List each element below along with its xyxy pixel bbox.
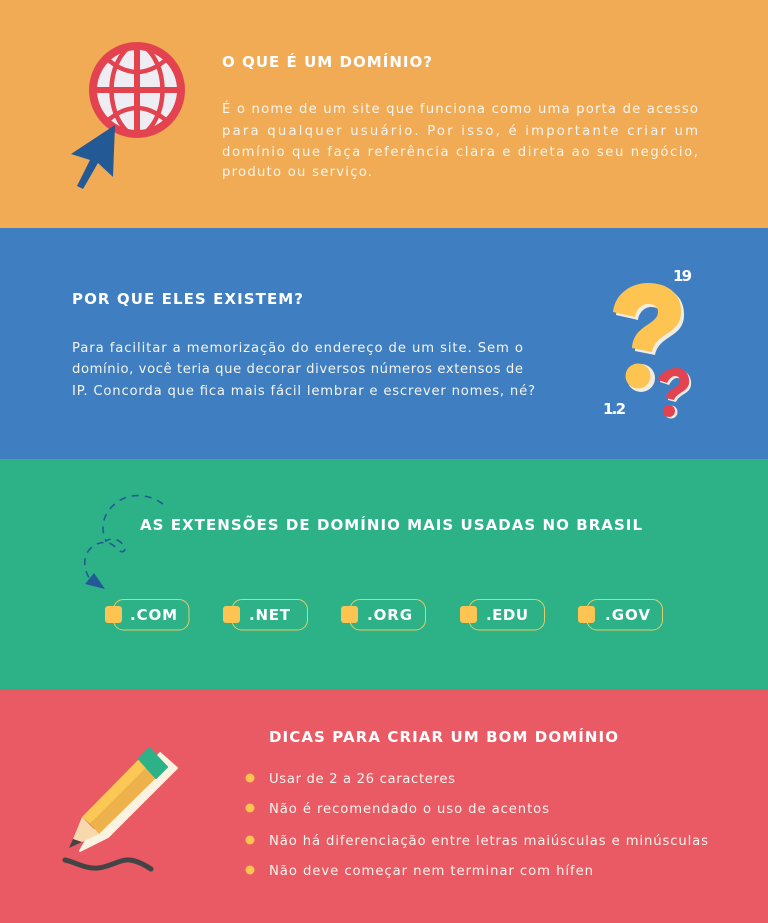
panel: por que eles existem — [0, 228, 768, 459]
icon: globe with cursor — [71, 42, 184, 189]
text block: domínio, você teria que decorar diversos números extensos de — [72, 361, 523, 377]
chip: .com — [105, 600, 189, 630]
chip: .org: .ORG — [367, 606, 412, 624]
panel: o que é um domínio — [0, 0, 768, 228]
text block: para qualquer usuário. Por isso, é importante criar um — [222, 123, 698, 139]
icon: question marks: 1.2 — [603, 400, 626, 418]
icon: question marks: 19 — [673, 267, 692, 285]
icon: pencil — [65, 748, 177, 869]
chip: .net: .NET — [249, 606, 291, 624]
heading: O QUE É UM DOMÍNIO? — [222, 52, 432, 71]
text block: IP. Concorda que fica mais fácil lembrar e escrever nomes, né? — [72, 383, 535, 399]
text block: produto ou serviço. — [222, 165, 372, 180]
list item: Não é recomendado o uso de acentos — [269, 801, 549, 817]
text block — [222, 100, 698, 180]
text block — [72, 341, 535, 399]
panel: extensões de domínio — [0, 459, 768, 690]
chip: .edu — [460, 600, 544, 630]
chip: .edu: .EDU — [486, 606, 528, 624]
heading: DICAS PARA CRIAR UM BOM DOMÍNIO — [269, 727, 618, 746]
text block: Para facilitar a memorização do endereço de um site. Sem o — [72, 341, 523, 356]
text block: domínio que faça referência clara e direta ao seu negócio, — [222, 144, 698, 160]
chip: .gov: .GOV — [605, 606, 650, 624]
panel: dicas — [0, 690, 768, 923]
list item: Usar de 2 a 26 caracteres — [269, 772, 455, 787]
heading: AS EXTENSÕES DE DOMÍNIO MAIS USADAS NO BRASIL — [140, 515, 642, 534]
icon: question marks — [603, 267, 692, 418]
chip: .org — [341, 600, 426, 630]
chip: .com: .COM — [130, 606, 177, 624]
text block: É o nome de um site que funciona como uma porta de acesso — [222, 100, 698, 117]
list item: Não deve começar nem terminar com hífen — [269, 863, 593, 879]
chip: .gov — [578, 600, 662, 630]
chip: .net — [223, 600, 308, 630]
list item: Não há diferenciação entre letras maiúsculas e minúsculas — [269, 833, 708, 849]
icon: dashed arrow — [85, 496, 163, 589]
heading: POR QUE ELES EXISTEM? — [72, 290, 303, 308]
